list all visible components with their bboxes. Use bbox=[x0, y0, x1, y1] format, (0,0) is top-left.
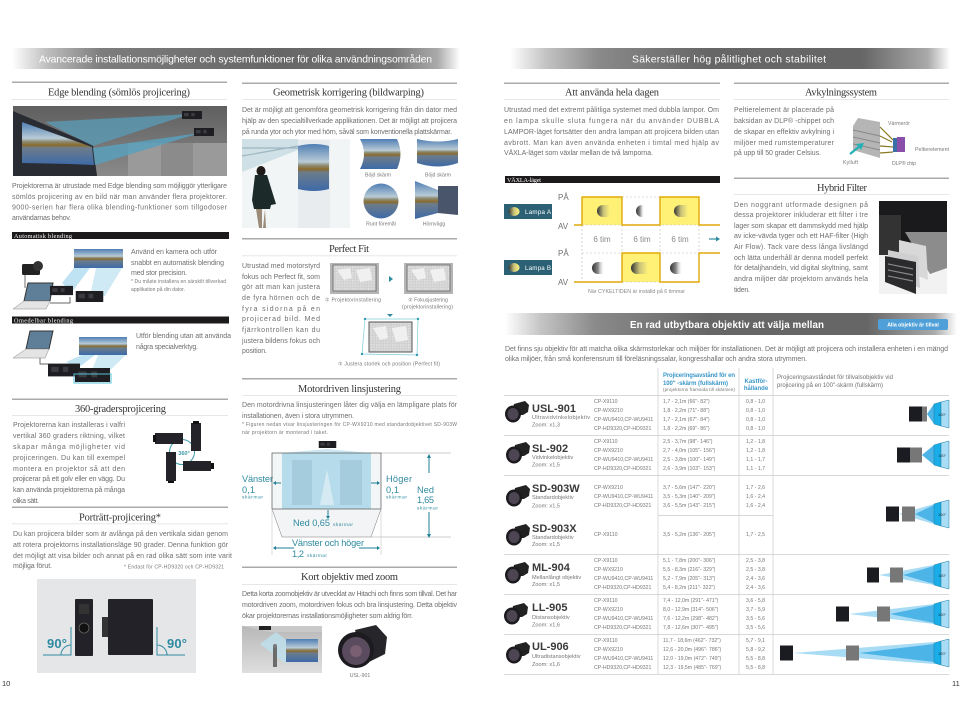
chart: lamp cycle: PÅ bbox=[558, 193, 569, 202]
table header: chart: projicering på en 100"-skärm (fullskärm) bbox=[777, 382, 883, 389]
text: full day: VÄXLA-läget som växlar mellan de två lamporna. bbox=[504, 149, 653, 157]
diagram row: UL-906: 100" bbox=[938, 651, 947, 656]
text: full day: LAMPOR-läget fortsätter den andra lampan att projicera bilden utan bbox=[504, 129, 719, 136]
text: automatic blending: med stor precision. bbox=[131, 270, 187, 277]
text: perfect fit: fyra sidorna på en bbox=[242, 305, 320, 313]
row: LL-905: CP-HD9320,CP-HD9321 bbox=[594, 625, 651, 631]
diagram: lens shift ranges: skärmar bbox=[242, 494, 263, 500]
text: geometric correction bbox=[242, 106, 457, 136]
text: perfect fit: de fyra hörnen och de bbox=[242, 295, 320, 302]
panel: hybrid filter bbox=[734, 178, 960, 688]
text: cooling: baksidan av DLP® -chippet och bbox=[734, 117, 834, 125]
text: edge blending intro: Projektorerna är utrustade med Edge blending som möjliggör ytterligare bbox=[12, 183, 227, 190]
bar: automatisk blending bbox=[12, 232, 229, 240]
text: lens shift: Den motordrivna linsjusteringen låter dig välja en lämpligare plats för bbox=[242, 401, 458, 409]
text: instant blending: några specialverktyg. bbox=[136, 343, 198, 351]
text: hybrid filter: för detaljhandeln, vid digital skyltning, samt bbox=[734, 265, 868, 272]
header banner: installation: Avancerade installationsmöjligheter och systemfunktioner för olika användningsområden bbox=[39, 54, 432, 66]
row: ML-904: Mellanlångt objektiv bbox=[532, 574, 581, 581]
panel: short zoom lens bbox=[242, 566, 458, 679]
text: geometric correction: hjälp av den specialtillverkade applikationen. Det är möjligt att projicera bbox=[242, 118, 457, 125]
row: USL-901 bbox=[505, 399, 765, 432]
row: SD-903X: CP-X9110 bbox=[594, 532, 618, 538]
row: SD-903W: 3,5 - 5,3m (140"- 209") bbox=[663, 494, 716, 500]
row: SD-903X: 1,7 - 2,5 bbox=[746, 532, 765, 538]
bar: automatisk blending: Automatisk blending bbox=[14, 233, 72, 240]
text: portrait projection: möjliga förut. bbox=[13, 563, 52, 570]
row: SL-902: 1,1 - 1,7 bbox=[746, 457, 765, 463]
illustration: automatic blending setup bbox=[13, 249, 123, 309]
diagram: cooling system: Värmerör bbox=[888, 121, 910, 127]
table header: chart: Projiceringsavståndet för tillvalsobjektiv vid bbox=[777, 374, 893, 381]
illustration: edge blending projection bbox=[13, 106, 227, 176]
header banner: reliability: Säkerställer hög pålitlighet och stabilitet bbox=[632, 54, 826, 66]
row: SD-903W: CP-WU9410,CP-WU9411 bbox=[594, 494, 653, 500]
warp examples: Böjd skärm bbox=[365, 172, 391, 178]
text: lens shift: när projektorn är monterad i taket. bbox=[242, 430, 328, 436]
button: all lenses optional: Alla objektiv är tillval bbox=[887, 322, 939, 328]
text: 360 projection: projiceringen. Du kan till exempel bbox=[13, 455, 125, 462]
diagram: lens shift ranges: 0,1 bbox=[242, 485, 255, 495]
text: short zoom lens bbox=[242, 591, 458, 620]
text: hybrid filter: tiden. bbox=[734, 287, 750, 294]
photo: USL-901 lens bbox=[338, 625, 387, 679]
page number 11: 11 bbox=[952, 679, 960, 688]
row: UL-906: CP-X9110 bbox=[594, 638, 618, 644]
table header: distance: 100" -skärm (fullskärm) bbox=[663, 381, 728, 387]
row: SD-903W: 1,6 - 2,4 bbox=[746, 494, 765, 500]
diagram row: UL-906 bbox=[780, 639, 949, 667]
heading: lens shift: Motordriven linsjustering bbox=[298, 384, 401, 395]
diagram: lens shift ranges bbox=[242, 441, 451, 559]
panel: cooling system bbox=[734, 82, 950, 167]
text: perfect fit: gör att man kan justera bbox=[242, 284, 320, 291]
text: short zoom lens: motordriven zoom, motordriven fokus och bra linsjustering. Detta objektiv bbox=[242, 602, 458, 609]
text: cooling: på upp till 50 grader Celsius. bbox=[734, 149, 821, 157]
diagram: lens shift ranges: 1,2 bbox=[292, 549, 304, 559]
text: automatic blending: snabbt en automatisk blending bbox=[131, 260, 224, 267]
warp examples bbox=[360, 139, 458, 228]
row: USL-901: Zoom: x1,3 bbox=[532, 422, 560, 428]
panel: portrait projection bbox=[2, 506, 232, 688]
label: lamp B bbox=[504, 260, 552, 275]
text: 360 projection: projicerar på ett golv eller en vägg. Du bbox=[13, 475, 125, 483]
diagram: cooling system: Kylluft bbox=[843, 160, 859, 166]
text: perfect fit: Utrustad med motorstyrd bbox=[242, 263, 320, 270]
text: instant blending bbox=[136, 333, 231, 351]
table: lens specifications bbox=[504, 368, 949, 674]
row: SD-903X: Zoom: x1,5 bbox=[532, 542, 560, 548]
text: automatic blending: applikation på din dator. bbox=[131, 286, 185, 293]
row: SL-902: 1,2 - 1,8 bbox=[746, 448, 765, 454]
diagram row: ML-904: 100" bbox=[938, 573, 947, 578]
row: LL-905: 7,8 - 12,6m (307"- 495") bbox=[663, 625, 719, 631]
heading: portrait: Porträtt-projicering* bbox=[79, 512, 161, 524]
diagram: lens shift ranges: skärmar bbox=[333, 522, 353, 528]
panel: 360 degree projection bbox=[12, 398, 228, 505]
diagram row: LL-905: 100" bbox=[938, 612, 947, 617]
row: USL-901: CP-X9110 bbox=[594, 399, 618, 405]
row: SD-903W: 3,7 - 5,6m (147"- 220") bbox=[663, 485, 716, 491]
panel: motorized lens shift bbox=[242, 378, 458, 559]
diagram row: SL-902: 100" bbox=[938, 453, 947, 458]
heading: cooling: Avkylningssystem bbox=[805, 88, 877, 98]
row: SL-902: Zoom: x1,5 bbox=[532, 462, 560, 468]
text: geometric correction: på runda ytor och ytor med hörn, såväl som konventionella plattskärmar. bbox=[242, 128, 452, 136]
diagram row: SD-903 bbox=[886, 500, 949, 528]
row: UL-906 bbox=[506, 638, 765, 671]
warp examples: Runt föremål bbox=[366, 220, 396, 228]
diagram row: SD-903: 100" bbox=[938, 512, 947, 517]
bar: omedelbar blending bbox=[12, 316, 229, 324]
text: full day: Utrustad med det extremt pålitliga systemet med dubbla lampor. Om bbox=[504, 106, 719, 114]
chart: lamp cycle: 6 tim bbox=[593, 235, 611, 244]
text: portrait projection: det möjligt att visa bilder och annat på en rad olika sätt som inte varit bbox=[13, 552, 232, 560]
diagram row: USL-901 bbox=[909, 400, 949, 428]
row: UL-906: CP-HD9320,CP-HD9321 bbox=[594, 665, 651, 671]
heading: geometric correction: Geometrisk korrigering (bildwarping) bbox=[273, 88, 424, 98]
text: full day bbox=[504, 106, 720, 157]
text: perfect fit: fokus och Perfect fit, som bbox=[242, 274, 320, 281]
row: ML-904: CP-WU9410,CP-WU9411 bbox=[594, 576, 653, 582]
bar: switch mode bbox=[505, 176, 720, 184]
icon: rotating projectors: 360° bbox=[178, 451, 190, 457]
row: SD-903W: 1,6 - 2,4 bbox=[746, 503, 765, 509]
row: SD-903W: CP-HD9320,CP-HD9321 bbox=[594, 503, 651, 509]
row: LL-905: 3,6 - 5,8 bbox=[746, 598, 765, 604]
text: cooling: miljöer med rumstemperaturer bbox=[734, 140, 835, 147]
row: LL-905: CP-WU9410,CP-WU9411 bbox=[594, 616, 653, 622]
text: full day: en lampa skulle sluta fungera när du använder DUBBLA bbox=[504, 118, 719, 125]
diagram: lens shift ranges: 1,65 bbox=[417, 495, 434, 505]
row: SL-902: CP-HD9320,CP-HD9321 bbox=[594, 466, 651, 472]
header banner: lenses bbox=[505, 313, 957, 335]
text: portrait projection bbox=[13, 530, 232, 570]
text: full day: avbrott. Man kan även använda enheten i timtal med hjälp av bbox=[504, 140, 720, 147]
diagram: perfect fit steps bbox=[325, 263, 453, 368]
text: perfect fit: fjärrkontrollen kan du bbox=[242, 327, 320, 334]
row: SL-902: SL-902 bbox=[532, 443, 568, 455]
text: lenses intro bbox=[505, 346, 948, 363]
text: hybrid filter: Air Flow). Tack vare dess långa livslängd bbox=[734, 243, 868, 251]
chart: lamp cycle: 6 tim bbox=[671, 235, 689, 244]
row: UL-906: Zoom: x1,6 bbox=[532, 662, 560, 668]
header banner: installation bbox=[12, 48, 460, 69]
row: USL-901: 1,7 - 2,1m (67"- 84") bbox=[663, 417, 710, 423]
row: UL-906: CP-WU9410,CP-WU9411 bbox=[594, 656, 653, 662]
row: SD-903W bbox=[506, 483, 765, 510]
row: ML-904: 2,4 - 3,6 bbox=[746, 576, 765, 582]
text: hybrid filter: av icke-vävda tyger och ett HAF-filter (High bbox=[734, 233, 868, 240]
row: UL-906: 5,5 - 8,8 bbox=[746, 665, 765, 671]
heading: short zoom lens: Kort objektiv med zoom bbox=[301, 572, 398, 583]
photo: projection room bbox=[242, 626, 322, 673]
warp examples: Böjd skärm bbox=[425, 172, 451, 178]
diagram: lens shift ranges: skärmar bbox=[307, 553, 327, 559]
row: LL-905: 7,6 - 12,2m (298"- 482") bbox=[663, 616, 719, 622]
row: LL-905: 3,5 - 5,6 bbox=[746, 616, 765, 622]
heading: full day: Att använda hela dagen bbox=[565, 88, 660, 98]
text: perfect fit: justera bildens fokus och bbox=[241, 338, 320, 345]
warp examples: Hörnvägg bbox=[423, 222, 445, 228]
text: edge blending intro: användarnas behov. bbox=[12, 215, 71, 222]
row: SD-903X: SD-903X bbox=[532, 523, 577, 535]
text: lens shift: installationen, även i stora utrymmen. bbox=[242, 413, 354, 420]
row: UL-906: 12,6 - 20,0m (496"- 786") bbox=[663, 647, 721, 653]
row: UL-906: 12,0 - 19,0m (472"- 749") bbox=[663, 656, 721, 662]
diagram: lens shift ranges: Ned bbox=[417, 485, 434, 495]
illustration: instant blending setup bbox=[13, 331, 127, 383]
header banner: reliability bbox=[510, 48, 950, 69]
heading: 360 degrees: 360-gradersprojicering bbox=[75, 404, 166, 415]
label: lamp B: Lampa B bbox=[525, 265, 551, 272]
row: SL-902: 2,7 - 4,0m (105"- 156") bbox=[663, 448, 716, 454]
label: lamp A: Lampa A bbox=[525, 209, 552, 216]
row: UL-906: Ultradistansobjektiv bbox=[532, 654, 581, 660]
row: ML-904: CP-X9110 bbox=[594, 558, 618, 564]
chart: projection distance diagrams bbox=[780, 400, 949, 667]
photo: USL-901 lens: USL-901 bbox=[350, 673, 370, 679]
bar: switch mode: VÄXLA-läget bbox=[507, 177, 541, 184]
diagram: perfect fit steps: ③ Justera storlek och position (Perfect fit) bbox=[338, 362, 440, 368]
row: SD-903X: Standardobjektiv bbox=[532, 535, 574, 541]
row: USL-901: 0,8 - 1,0 bbox=[746, 426, 765, 432]
row: UL-906: 5,8 - 9,2 bbox=[746, 647, 765, 653]
row: UL-906: UL-906 bbox=[532, 641, 569, 653]
row: USL-901: 0,8 - 1,0 bbox=[746, 399, 765, 405]
row: ML-904: ML-904 bbox=[532, 562, 571, 574]
label: lamp A bbox=[504, 204, 552, 219]
text: 360 projection: kan använda projektorerna på många bbox=[13, 486, 125, 494]
text: edge blending intro: sömlös projicering av en bild när man använder flera projektorer. bbox=[12, 194, 227, 201]
row: ML-904: 2,5 - 3,8 bbox=[746, 558, 765, 564]
row: SD-903X bbox=[506, 523, 765, 548]
panel: edge blending bbox=[12, 82, 231, 383]
text: geometric correction: Det är möjligt att genomföra geometrisk korrigering från din dator med bbox=[242, 106, 457, 114]
row: ML-904: CP-HD9320,CP-HD9321 bbox=[594, 585, 651, 591]
row: SL-902: 2,6 - 3,9m (103"- 153") bbox=[663, 466, 716, 472]
diagram: lens shift ranges: Vänster och höger bbox=[292, 538, 364, 548]
text: hybrid filter: dessa projektorer inkluderar ett filter i tre bbox=[734, 212, 868, 219]
row: SL-902: 2,5 - 3,8m (100"- 149") bbox=[663, 457, 716, 463]
text: 360 projection bbox=[13, 422, 125, 505]
diagram: lens shift ranges: Ned 0,65 bbox=[293, 518, 330, 528]
photo: curved column projection bbox=[242, 139, 350, 228]
row: USL-901: Ultravidvinkelobjektiv bbox=[532, 415, 590, 421]
illustration: portrait rotation bbox=[37, 579, 196, 673]
diagram: cooling system: DLP® chip bbox=[892, 160, 916, 167]
text: 360 projection: vertikal 360 graders riktning, vilket bbox=[13, 433, 125, 440]
text: portrait projection: Du kan projicera bilder som är avlånga på den vertikala sidan genom bbox=[13, 530, 228, 538]
heading: edge blending: Edge blending (sömlös projicering) bbox=[48, 88, 190, 98]
row: LL-905: CP-X9110 bbox=[594, 598, 618, 604]
row: USL-901: 0,8 - 1,0 bbox=[746, 417, 765, 423]
diagram: lens shift ranges: Höger bbox=[386, 474, 412, 484]
row: LL-905: 3,7 - 5,9 bbox=[746, 607, 765, 613]
row: SD-903W: SD-903W bbox=[532, 483, 580, 495]
text: automatic blending: Använd en kamera och utför bbox=[131, 249, 218, 256]
row: ML-904: 5,1 - 7,8m (200"- 306") bbox=[663, 558, 716, 564]
text: lens shift: * Figuren nedan visar linsjusteringen för CP-WX9210 med standardobjektivet SD-903W bbox=[242, 422, 457, 428]
header banner: lenses: En rad utbytbara objektiv att välja mellan bbox=[630, 320, 824, 331]
row: SD-903X: 3,5 - 5,2m (136"- 205") bbox=[663, 532, 716, 538]
row: USL-901: CP-HD9320,CP-HD9321 bbox=[594, 426, 651, 432]
text: 360 projection: montera en projektor så att den bbox=[13, 465, 125, 473]
text: 360 projection: olika sätt. bbox=[13, 498, 39, 505]
diagram: lens shift ranges: Vänster bbox=[242, 474, 273, 484]
row: UL-906: 5,5 - 8,8 bbox=[746, 656, 765, 662]
row: SL-902 bbox=[506, 439, 765, 472]
text: portrait projection: * Endast för CP-HD9320 och CP-HD9321 bbox=[124, 564, 224, 570]
diagram: lens shift ranges: 0,1 bbox=[386, 485, 399, 495]
row: LL-905 bbox=[504, 598, 765, 631]
heading: hybrid filter: Hybrid Filter bbox=[817, 183, 868, 194]
row: UL-906: 11,7 - 18,6m (462"- 732") bbox=[663, 638, 721, 644]
row: LL-905: Zoom: x1,6 bbox=[532, 622, 560, 628]
chart: lamp cycle: AV bbox=[558, 222, 569, 231]
row: USL-901: 1,7 - 2,1m (66"- 82") bbox=[663, 399, 710, 405]
page number 10: 10 bbox=[2, 679, 10, 688]
row: LL-905: 7,4 - 12,0m (291"- 471") bbox=[663, 598, 719, 604]
chart: lamp cycle: PÅ bbox=[558, 249, 569, 258]
row: LL-905: 8,0 - 12,9m (314"- 506") bbox=[663, 607, 719, 613]
diagram: lens shift ranges: skärmar bbox=[417, 506, 438, 512]
row: SL-902: 2,5 - 3,7m (98"- 146") bbox=[663, 439, 713, 445]
chart: lamp cycle: AV bbox=[558, 278, 569, 287]
illustration: portrait rotation: 90° bbox=[47, 636, 67, 651]
diagram row: USL-901: 100" bbox=[938, 412, 947, 417]
diagram row: LL-905 bbox=[836, 600, 949, 628]
row: LL-905: CP-WX9210 bbox=[594, 607, 623, 613]
text: hybrid filter: och lätta underhåll är denna modell perfekt bbox=[734, 254, 868, 262]
row: USL-901: 1,8 - 2,2m (71"- 88") bbox=[663, 408, 710, 414]
panel: geometric correction bbox=[242, 82, 458, 228]
text: perfect fit bbox=[241, 263, 320, 355]
table header: distance: (projektorns framsida till skärmen) bbox=[663, 387, 736, 392]
illustration: portrait rotation: 90° bbox=[167, 636, 187, 651]
icon: rotating projectors bbox=[153, 421, 214, 483]
text: hybrid filter: lager som skapar ett dammskydd med hjälp bbox=[734, 223, 868, 230]
diagram: perfect fit steps: ① Projektorinstallering bbox=[325, 298, 381, 304]
row: ML-904: 5,5 - 8,3m (216"- 329") bbox=[663, 567, 716, 573]
text: lens shift bbox=[242, 401, 458, 436]
row: SD-903W: 1,7 - 2,6 bbox=[746, 485, 765, 491]
row: SL-902: CP-WU9410,CP-WU9411 bbox=[594, 457, 653, 463]
row: LL-905: 3,5 - 5,6 bbox=[746, 625, 765, 631]
row: SL-902: 1,1 - 1,7 bbox=[746, 466, 765, 472]
row: ML-904: 5,4 - 8,2m (211"- 322") bbox=[663, 585, 715, 591]
row: SL-902: CP-WX9210 bbox=[594, 448, 623, 454]
text: short zoom lens: ökar projektorernas installationsmöjligheter som aldrig förr. bbox=[242, 613, 413, 620]
text: lenses intro: Det finns sju objektiv för att matcha olika skärmstorlekar och miljöer för installationen. Det är möjligt att projicera och installera enheten i en mängd bbox=[505, 346, 948, 353]
row: ML-904: 2,4 - 3,6 bbox=[746, 585, 765, 591]
row: USL-901: 1,8 - 2,2m (69"- 86") bbox=[663, 426, 710, 432]
row: UL-906: 12,3 - 19,5m (485"- 769") bbox=[663, 665, 721, 671]
chart: lamp cycle: 6 tim bbox=[633, 235, 651, 244]
text: perfect fit: projicerad bild. Med bbox=[242, 316, 320, 323]
heading: perfect fit: Perfect Fit bbox=[329, 244, 369, 255]
panel: perfect fit bbox=[241, 238, 457, 368]
row: USL-901: USL-901 bbox=[532, 403, 576, 415]
text: cooling: Peltierelement är placerade på bbox=[734, 106, 834, 114]
table header: distance: Projiceringsavstånd för en bbox=[663, 372, 735, 379]
row: UL-906: CP-WX9210 bbox=[594, 647, 623, 653]
table header: chart bbox=[777, 374, 893, 389]
row: LL-905: LL-905 bbox=[532, 602, 567, 614]
text: lenses intro: olika miljöer, från små konferensrum till föreläsningssalar, kongresshallar och andra stora utrymmen. bbox=[505, 355, 807, 363]
diagram row: SL-902 bbox=[897, 441, 949, 469]
panel: full day use bbox=[504, 82, 720, 295]
row: ML-904 bbox=[505, 558, 765, 591]
diagram: lens shift ranges: skärmar bbox=[386, 494, 407, 500]
text: edge blending intro bbox=[12, 183, 228, 222]
text: perfect fit: position. bbox=[242, 348, 267, 355]
table header: throw ratio: Kastför- bbox=[744, 379, 768, 385]
text: edge blending intro: 9000-serien har flera olika blending-funktioner som tillgodoser bbox=[12, 204, 228, 212]
row: SD-903W: Zoom: x1,5 bbox=[532, 504, 560, 510]
row: SL-902: Vidvinkelobjektiv bbox=[532, 455, 573, 461]
table header: throw ratio: hållande bbox=[744, 385, 769, 392]
text: short zoom lens: Detta korta zoomobjektiv är utvecklat av Hitachi och finns som tillval. Det har bbox=[242, 591, 458, 598]
text: 360 projection: skapar många möjligheter vid bbox=[13, 443, 125, 451]
row: USL-901: 0,8 - 1,0 bbox=[746, 408, 765, 414]
row: ML-904: CP-WX9210 bbox=[594, 567, 623, 573]
diagram: cooling system: Peltierelement bbox=[915, 147, 950, 153]
row: SD-903W: 3,6 - 5,5m (143"- 215") bbox=[663, 503, 716, 509]
row: SL-902: 1,2 - 1,8 bbox=[746, 439, 765, 445]
text: automatic blending: * Du måste installera en särskilt tillverkad bbox=[131, 278, 226, 285]
text: hybrid filter bbox=[734, 201, 868, 294]
text: instant blending: Utför blending utan att använda bbox=[136, 333, 231, 340]
row: SD-903W: Standardobjektiv bbox=[532, 495, 574, 501]
diagram: cooling system bbox=[843, 118, 950, 167]
row: SD-903W: CP-WX9210 bbox=[594, 485, 623, 491]
row: ML-904: 5,2 - 7,9m (205"- 313") bbox=[663, 576, 716, 582]
row: LL-905: Distansobjektiv bbox=[532, 615, 570, 621]
text: cooling: de skapar en effektiv avkylning i bbox=[734, 129, 834, 136]
button: all lenses optional bbox=[878, 319, 948, 330]
row: ML-904: 2,5 - 3,8 bbox=[746, 567, 765, 573]
text: hybrid filter: andra miljöer där projektorn används hela bbox=[734, 276, 868, 283]
text: cooling bbox=[734, 106, 835, 157]
row: USL-901: CP-WX9210 bbox=[594, 408, 623, 414]
row: ML-904: Zoom: x1,5 bbox=[532, 582, 560, 588]
row: USL-901: CP-WU9410,CP-WU9411 bbox=[594, 417, 653, 423]
bar: omedelbar blending: Omedelbar blending bbox=[14, 318, 73, 324]
text: 360 projection: Projektorerna kan installeras i valfri bbox=[13, 422, 125, 429]
diagram: perfect fit steps: (projektorinstallering) bbox=[402, 304, 453, 310]
text: automatic blending bbox=[131, 249, 226, 293]
text: hybrid filter: Den noggrant utformade designen på bbox=[734, 201, 868, 209]
table header: throw ratio bbox=[744, 379, 769, 392]
diagram: perfect fit steps: ② Fokusjustering bbox=[408, 298, 448, 304]
table header: distance bbox=[663, 372, 736, 392]
photo: filter layers bbox=[879, 201, 947, 294]
row: SL-902: CP-X9110 bbox=[594, 439, 618, 445]
chart: lamp cycle bbox=[558, 193, 720, 295]
diagram row: ML-904 bbox=[867, 561, 949, 589]
row: UL-906: 5,7 - 9,1 bbox=[746, 638, 765, 644]
text: portrait projection: att rotera projektorns installationsläge 90 grader. Denna funktion gör bbox=[13, 542, 229, 549]
chart: lamp cycle: När CYKELTIDEN är inställd på 6 timmar bbox=[588, 288, 685, 295]
